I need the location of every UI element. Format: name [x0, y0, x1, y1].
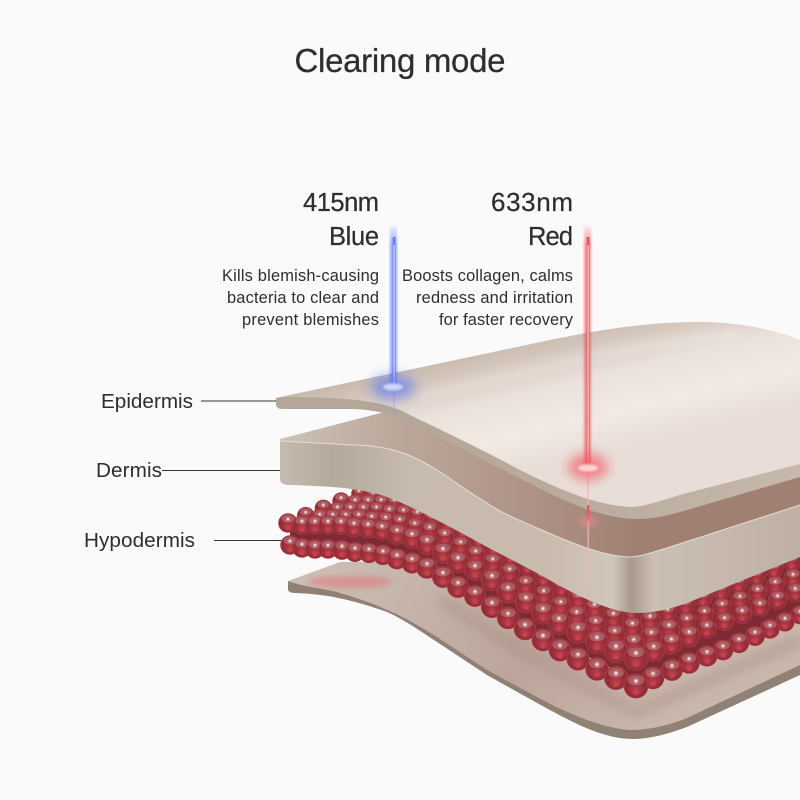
text block: 415nm blue: bacteria to clear and: [227, 289, 379, 307]
dermis layer: [280, 400, 800, 613]
text block: 415nm blue: Blue: [329, 223, 379, 251]
text block: 633nm red: [402, 187, 574, 329]
text block: 633nm red: for faster recovery: [439, 311, 574, 329]
text block: 633nm red: Boosts collagen, calms: [402, 267, 573, 285]
label: Hypodermis: Hypodermis: [84, 529, 195, 552]
beam: blue light: [371, 226, 415, 416]
text block: 415nm blue: [222, 189, 379, 329]
text block: 633nm red: 633nm: [491, 187, 573, 217]
text block: 415nm blue: Kills blemish-causing: [222, 267, 379, 285]
text block: 633nm red: Red: [528, 223, 573, 251]
label: Epidermis: Epidermis: [101, 390, 193, 413]
epidermis layer: [276, 322, 800, 519]
bottom sphere row: [280, 535, 800, 698]
hypodermis base plate: [288, 560, 800, 739]
text block: 415nm blue: prevent blemishes: [242, 311, 379, 329]
text block: 415nm blue: 415nm: [303, 189, 379, 217]
top sphere rows: [278, 420, 800, 670]
sphere underlay: [290, 497, 800, 680]
label: Dermis: Dermis: [96, 459, 162, 482]
hypodermis spheres: [278, 420, 800, 698]
beam: red light: [568, 226, 608, 582]
title: Clearing mode: [294, 42, 506, 79]
text block: 633nm red: redness and irritation: [416, 289, 573, 307]
